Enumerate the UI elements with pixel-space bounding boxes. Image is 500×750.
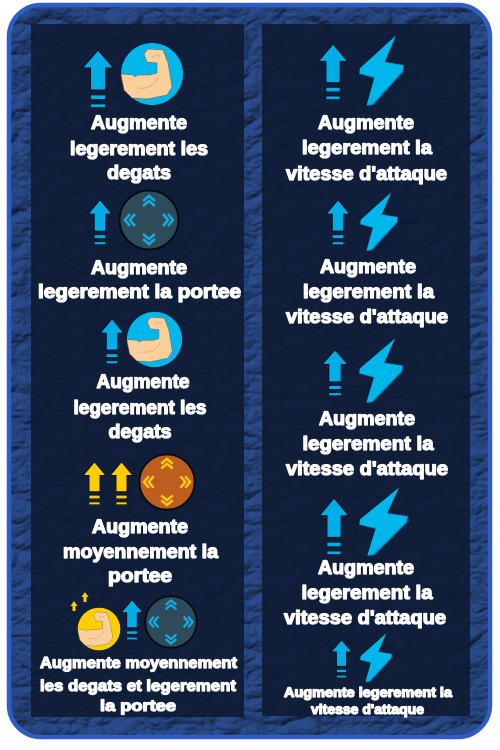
caption: les degats et legerement (40, 678, 237, 695)
caption: legerement la (302, 138, 432, 159)
caption (70, 113, 208, 184)
caption: legerement la portee (38, 282, 241, 303)
icon: lightning bolt (360, 193, 398, 251)
icon: range circle (145, 596, 197, 648)
icon: flexed muscle (127, 312, 182, 367)
caption: vitesse d'attaque (286, 164, 447, 185)
caption: moyennement la (63, 542, 218, 563)
caption: Augmente (320, 257, 416, 278)
caption: vitesse d'attaque (286, 459, 448, 480)
icon: blue arrow (121, 600, 143, 640)
icon: lightning bolt (359, 488, 408, 556)
icon: blue arrow (326, 200, 350, 245)
item 2: range up (38, 190, 241, 303)
icon: blue arrow (100, 319, 124, 364)
icon: yellow arrows (83, 462, 133, 505)
item 3: attack speed up (286, 339, 448, 480)
icon: lightning bolt (360, 633, 392, 682)
caption: legerement les (70, 139, 208, 160)
caption (40, 655, 238, 715)
caption: Augmente (96, 372, 190, 393)
caption (286, 113, 447, 185)
icon: blue arrow (318, 44, 348, 100)
icon: blue arrow (322, 350, 348, 396)
panel: right column (262, 24, 470, 717)
icon: blue arrow (331, 640, 352, 678)
icon: flexed muscle (121, 43, 183, 105)
caption (286, 409, 448, 480)
item 2: attack speed up (286, 193, 448, 328)
caption: Augmente (91, 258, 187, 279)
caption: legerement les (74, 398, 206, 419)
icon: yellow muscle (70, 592, 120, 650)
caption (63, 517, 218, 587)
item 5: damage and range up (40, 592, 238, 715)
caption: Augmente (318, 558, 414, 579)
caption: portee (108, 566, 172, 587)
caption: vitesse d'attaque (311, 702, 424, 717)
icon: range circle (120, 190, 178, 250)
caption: Augmente (318, 113, 414, 134)
caption: vitesse d'attaque (286, 307, 448, 328)
icon: blue arrow (319, 498, 349, 555)
panel: left column (31, 24, 244, 717)
caption: la portee (100, 698, 176, 715)
icon: orange range circle (139, 454, 195, 510)
item 4: range medium up (63, 454, 218, 587)
icon: blue arrow (82, 50, 114, 108)
caption (74, 372, 206, 443)
item 1: damage up (70, 43, 208, 184)
item 3: damage up (74, 312, 206, 443)
caption: legerement la (302, 583, 433, 604)
item 4: attack speed up (284, 488, 446, 629)
caption: legerement la (302, 434, 434, 455)
caption: Augmente legerement la (284, 685, 453, 700)
icon: lightning bolt (359, 339, 403, 403)
caption: Augmente (91, 113, 187, 134)
icon: lightning bolt (359, 36, 404, 106)
caption (286, 257, 448, 328)
item 5: attack speed up (284, 633, 453, 717)
caption (284, 558, 446, 629)
caption: vitesse d'attaque (284, 608, 446, 629)
item 1: attack speed up (286, 36, 447, 185)
caption: legerement la (303, 282, 434, 303)
caption (38, 258, 241, 303)
icon: blue arrow (88, 200, 112, 245)
caption: Augmente moyennement (40, 655, 238, 672)
caption: Augmente (319, 409, 415, 430)
caption (284, 685, 453, 717)
caption: degats (108, 422, 172, 443)
caption: Augmente (92, 517, 188, 538)
caption: degats (107, 163, 171, 184)
